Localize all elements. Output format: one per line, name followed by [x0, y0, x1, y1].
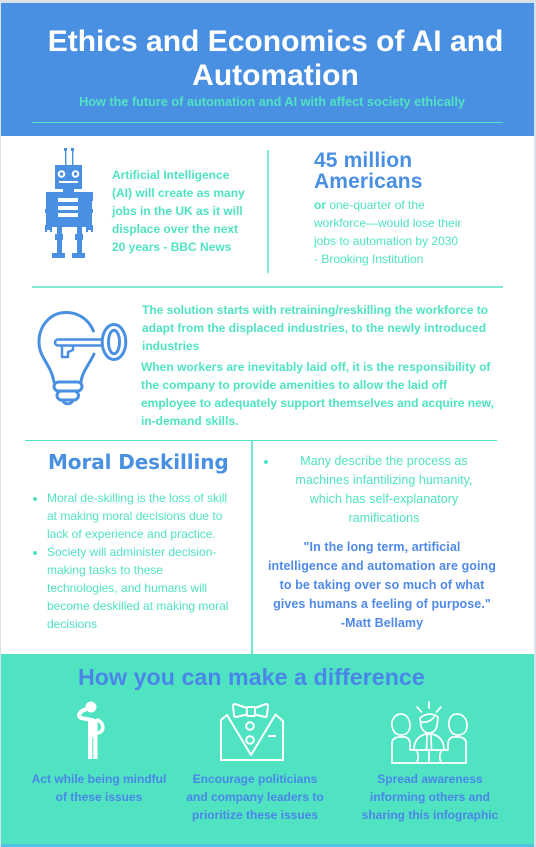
icon: robot — [45, 148, 93, 258]
text: AI jobs: displace over the next — [112, 222, 238, 236]
bottom heading: How you can make a difference — [78, 664, 425, 690]
header rule — [32, 122, 503, 123]
quote: to be taking over so much of what — [280, 578, 484, 592]
icon: thinking person — [77, 702, 105, 759]
action text 1: Act while being mindful — [32, 772, 166, 786]
action text 1 — [32, 772, 166, 804]
stat heading: 45 million — [314, 149, 412, 172]
text: solution — [141, 303, 494, 428]
text: infantilizing — [295, 454, 473, 525]
bottom edge strip — [1, 844, 534, 847]
stat text — [314, 198, 462, 266]
text: AI jobs: 20 years - BBC News — [112, 240, 231, 254]
stat heading: Americans — [314, 170, 423, 193]
quote: gives humans a feeling of purpose." — [273, 597, 491, 611]
text: infantilizing: machines infantilizing humanity, — [295, 473, 473, 487]
action text 2: and company leaders to — [186, 790, 324, 804]
subtitle: How the future of automation and AI with affect society ethically — [79, 95, 465, 109]
action text 1: of these issues — [56, 790, 142, 804]
quote — [268, 540, 496, 630]
bulleted list: decisions — [47, 617, 97, 631]
section rule — [32, 286, 503, 288]
bulleted list: at making moral decisions due to — [47, 509, 222, 523]
action text 2 — [186, 772, 324, 822]
text: solution: the company to provide amenities to allow the laid off — [141, 378, 447, 392]
bulleted list: technologies, and humans will — [47, 581, 207, 595]
panel: how you can make a difference — [1, 654, 534, 847]
stat text: workforce—would lose their — [314, 216, 461, 230]
title: Automation — [192, 59, 359, 92]
stat text: or one-quarter of the — [314, 198, 425, 212]
text: infantilizing: ramifications — [349, 511, 419, 525]
text: AI jobs — [112, 168, 245, 254]
text: solution: adapt from the displaced industries, to the newly introduced — [142, 321, 486, 335]
text: AI jobs: Artificial Intelligence — [112, 168, 229, 182]
bulleted list: become deskilled at making moral — [47, 599, 228, 613]
action text 3: sharing this infographic — [362, 808, 498, 822]
text: solution: employee to adequately support themselves and acquire new, — [141, 396, 494, 410]
icon: group of people — [391, 701, 468, 764]
action text 3: informing others and — [370, 790, 490, 804]
bulleted list: Society will administer decision- — [47, 545, 216, 559]
action text 2: prioritize these issues — [192, 808, 318, 822]
stat text: jobs to automation by 2030 — [314, 234, 458, 248]
action text 2: Encourage politicians — [193, 772, 317, 786]
title — [48, 25, 503, 92]
text: solution: in-demand skills. — [141, 414, 238, 428]
bulleted list: lack of experience and practice. — [47, 527, 216, 541]
text: solution: industries — [142, 339, 199, 353]
bulleted list: Moral de-skilling is the loss of skill — [47, 491, 227, 505]
text: solution: When workers are inevitably laid off, it is the responsibility of — [141, 360, 490, 374]
icon: tuxedo — [220, 703, 284, 761]
header banner — [1, 3, 534, 136]
text: AI jobs: jobs in the UK as it will — [112, 204, 243, 218]
icon: lightbulb with key — [38, 311, 128, 406]
right bullet — [264, 460, 268, 464]
quote: "In the long term, artificial — [304, 540, 460, 554]
action text 3: Spread awareness — [377, 772, 483, 786]
heading: Moral Deskilling: Moral Deskilling — [48, 450, 229, 474]
bulleted list: making tasks to these — [47, 563, 163, 577]
bulleted list — [33, 491, 228, 631]
stat heading — [314, 149, 423, 193]
text: solution: The solution starts with retraining/reskilling the workforce to — [142, 303, 488, 317]
section rule — [25, 440, 497, 441]
quote: intelligence and automation are going — [268, 559, 496, 573]
text: AI jobs: (AI) will create as many — [112, 186, 245, 200]
action text 3 — [362, 772, 498, 822]
stat text: - Brooking Institution — [314, 252, 423, 266]
title: Ethics and Economics of AI and — [48, 25, 503, 58]
text: infantilizing: Many describe the process as — [300, 454, 468, 468]
text: infantilizing: which has self-explanatory — [310, 492, 458, 506]
vertical divider top — [267, 150, 268, 273]
vertical divider bottom — [251, 441, 253, 654]
quote: -Matt Bellamy — [341, 616, 423, 630]
